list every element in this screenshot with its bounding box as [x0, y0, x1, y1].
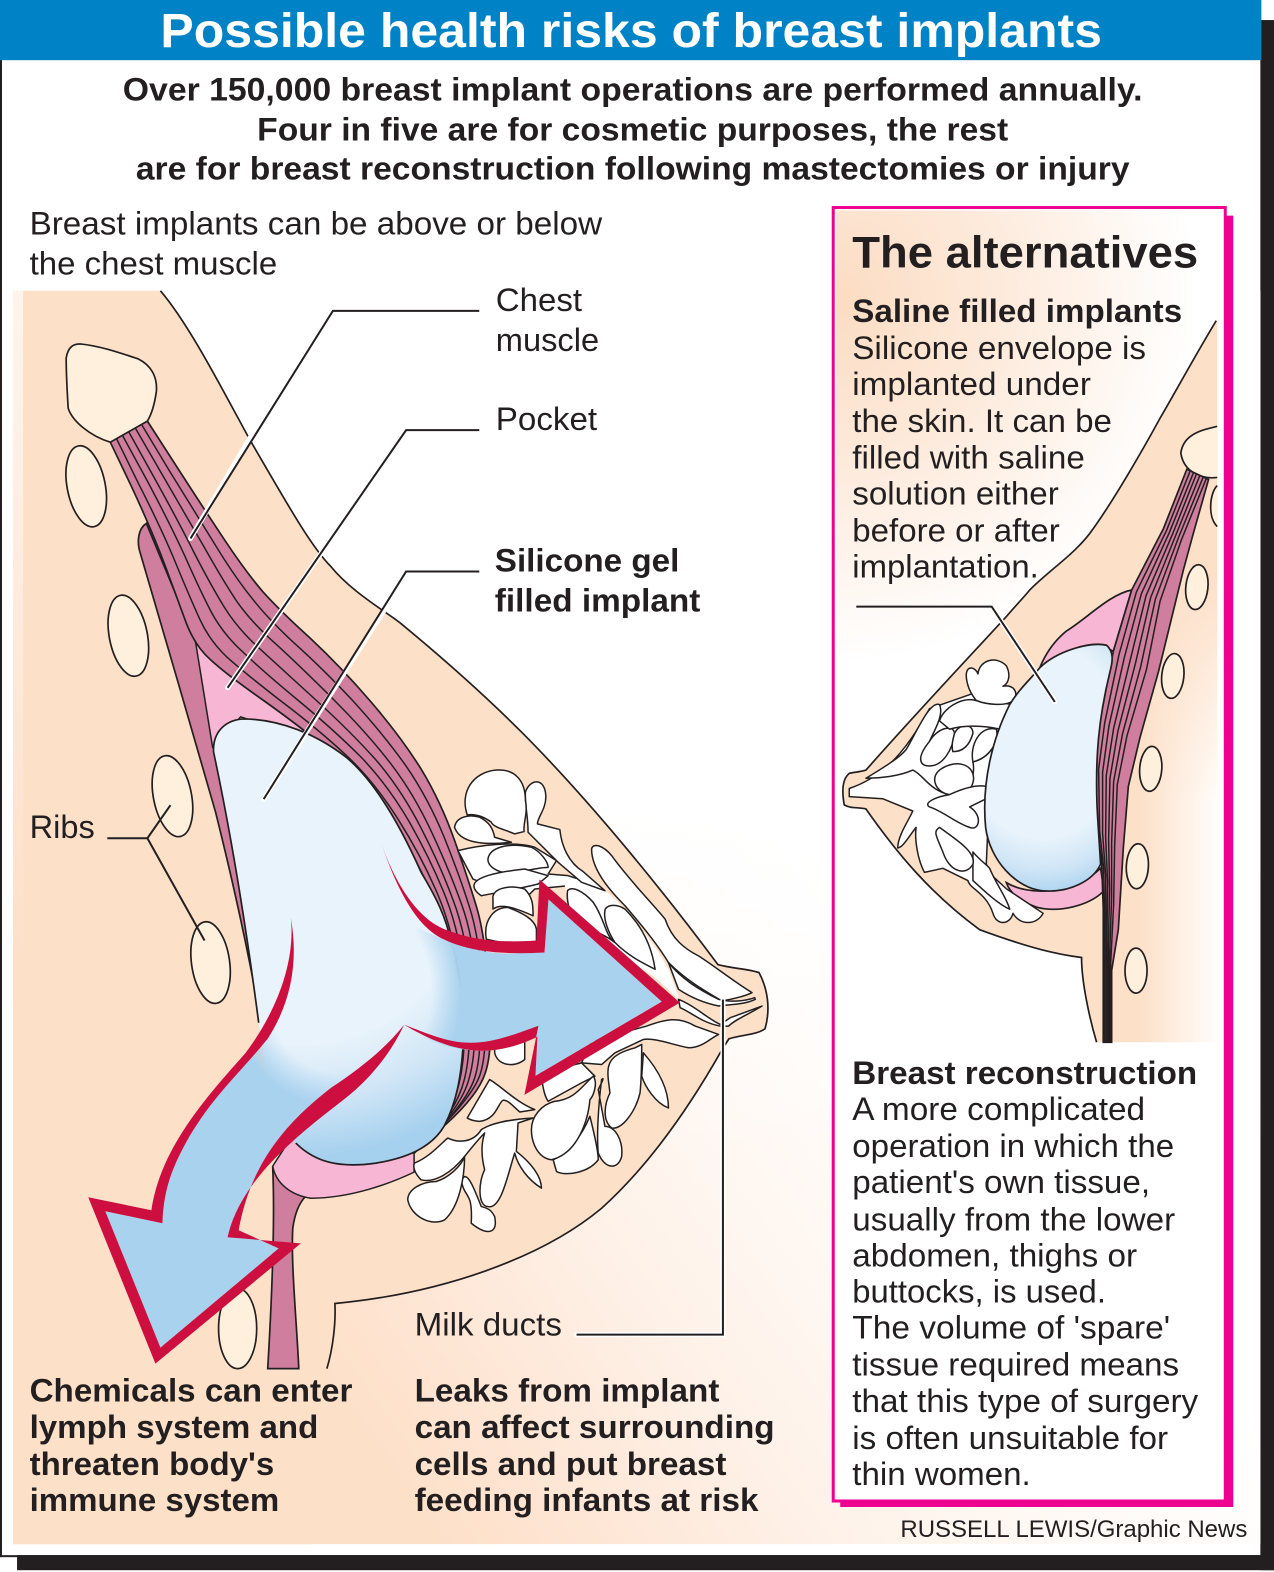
- panel: the alternatives: [833, 208, 1233, 1507]
- title banner: Possible health risks of breast implants: [160, 4, 1102, 58]
- ribs: [60, 344, 257, 1369]
- caption: leak risk: can affect surrounding: [415, 1409, 775, 1445]
- leader and label: chest muscle: [191, 282, 599, 538]
- leader and label: chest muscle: muscle: [496, 322, 599, 358]
- caption: leak risk: cells and put breast: [415, 1446, 727, 1482]
- reconstruction text: [852, 1055, 1198, 1492]
- reconstruction text: that this type of surgery: [852, 1383, 1198, 1419]
- body outline: [13, 291, 768, 1544]
- inset muscle fibres: [1099, 471, 1206, 1042]
- reconstruction text: Breast reconstruction: [852, 1055, 1197, 1091]
- panel heading: The alternatives: [852, 229, 1198, 278]
- intro text: Over 150,000 breast implant operations are performed annually.: [123, 71, 1143, 107]
- saline text: [852, 293, 1182, 585]
- chest muscle: [110, 421, 491, 1153]
- saline text: the skin. It can be: [852, 403, 1112, 439]
- reconstruction text: operation in which the: [852, 1128, 1174, 1164]
- saline text: Saline filled implants: [852, 293, 1182, 329]
- inset diagram: saline implant: [843, 321, 1218, 1045]
- caption: lymph system risk: [30, 1373, 352, 1518]
- inset pocket: [1040, 590, 1132, 668]
- leader and label: ribs: Ribs: [30, 809, 95, 845]
- caption: lymph system risk: immune system: [30, 1482, 279, 1518]
- leader and label: silicone gel implant: Silicone gel: [495, 543, 679, 579]
- leader and label: milk ducts: [415, 1000, 723, 1343]
- rear chest muscle band: [138, 523, 301, 1033]
- inset leader: [856, 607, 1055, 702]
- inset glands: [849, 660, 1043, 923]
- reconstruction text: A more complicated: [852, 1091, 1145, 1127]
- background tint: [13, 291, 1260, 1544]
- inset muscle: [1095, 469, 1209, 1042]
- panel border shadow: [840, 216, 1233, 1507]
- muscle fibres: [116, 424, 485, 1153]
- saline text: implanted under: [852, 366, 1091, 402]
- caption: leak risk: feeding infants at risk: [415, 1482, 759, 1518]
- inset ribs: [1125, 426, 1217, 993]
- reconstruction text: buttocks, is used.: [852, 1273, 1106, 1309]
- leader and label: pocket: [228, 401, 597, 688]
- inset outline: [843, 321, 1216, 1042]
- inset body: [843, 321, 1217, 1042]
- saline text: before or after: [852, 512, 1060, 548]
- saline text: implantation.: [852, 549, 1039, 585]
- leader and label: silicone gel implant: [264, 543, 701, 799]
- leader and label: silicone gel implant: filled implant: [495, 583, 701, 619]
- panel border: [833, 208, 1225, 1501]
- leader and label: chest muscle: Chest: [496, 282, 582, 318]
- intro text: Four in five are for cosmetic purposes, the rest: [257, 111, 1009, 147]
- leader and label: pocket: Pocket: [496, 401, 597, 437]
- reconstruction text: thin women.: [852, 1456, 1031, 1492]
- saline text: Silicone envelope is: [852, 330, 1146, 366]
- caption: lymph system risk: lymph system and: [30, 1409, 318, 1445]
- caption: lymph system risk: Chemicals can enter: [30, 1373, 352, 1409]
- arrow: chemicals to lymph system: [88, 917, 404, 1364]
- label: intro to implant position: the chest muscle: [30, 246, 277, 282]
- label: intro to implant position: Breast implants can be above or below: [30, 206, 603, 242]
- milk glands: [408, 770, 762, 1232]
- pocket: [196, 642, 346, 752]
- leader and label: ribs: [30, 805, 205, 941]
- reconstruction text: abdomen, thighs or: [852, 1237, 1137, 1273]
- intro text: are for breast reconstruction following mastectomies or injury: [136, 150, 1130, 186]
- reconstruction text: The volume of 'spare': [852, 1310, 1170, 1346]
- reconstruction text: is often unsuitable for: [852, 1420, 1168, 1456]
- arrow: leak towards milk ducts: [381, 842, 680, 1095]
- silicone gel implant: [214, 719, 463, 1165]
- leader and label: milk ducts: Milk ducts: [415, 1307, 562, 1343]
- caption: leak risk: Leaks from implant: [415, 1373, 720, 1409]
- inset saline implant: [985, 644, 1112, 891]
- title banner: [0, 0, 1261, 60]
- label: intro to implant position: [30, 206, 603, 282]
- intro text: [123, 71, 1143, 186]
- panel background: [834, 209, 1225, 1501]
- saline text: filled with saline: [852, 439, 1085, 475]
- reconstruction text: patient's own tissue,: [852, 1164, 1150, 1200]
- inset fade to right edge: [1152, 612, 1218, 1042]
- caption: lymph system risk: threaten body's: [30, 1446, 274, 1482]
- caption: leak risk: [415, 1373, 775, 1518]
- reconstruction text: usually from the lower: [852, 1201, 1175, 1237]
- main breast cross-section diagram: [13, 291, 768, 1544]
- saline text: solution either: [852, 475, 1059, 511]
- reconstruction text: tissue required means: [852, 1347, 1179, 1383]
- credit: RUSSELL LEWIS/Graphic News: [900, 1516, 1247, 1543]
